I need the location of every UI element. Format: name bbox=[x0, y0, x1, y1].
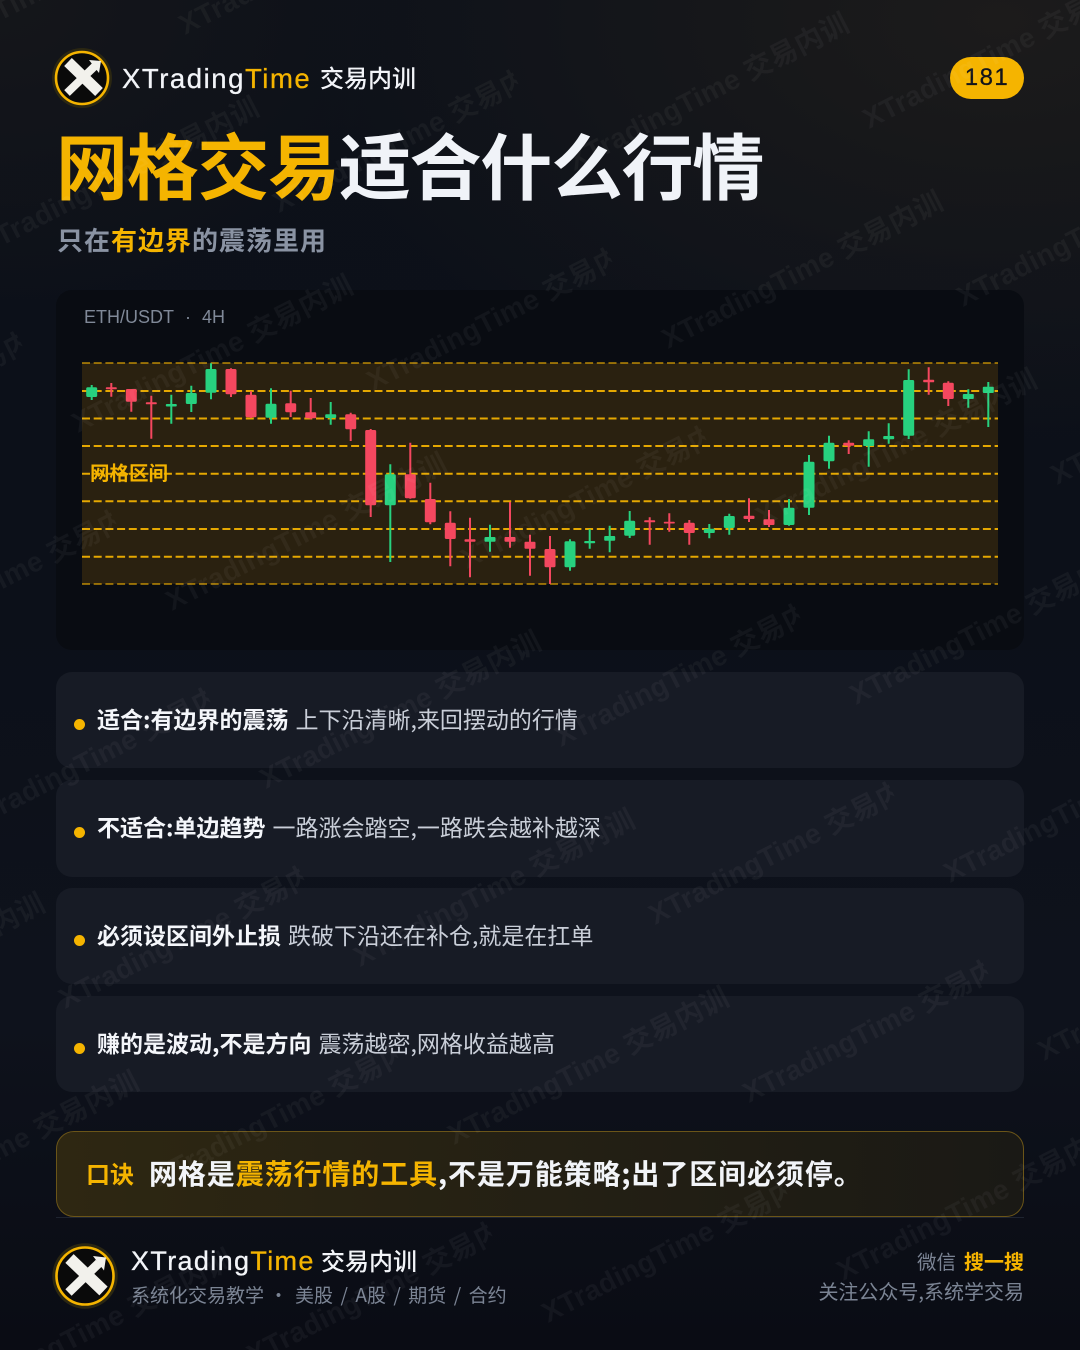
watermark layer: XTradingTime 交易内训 bbox=[161, 447, 452, 616]
card text: 赚的是波动,不是方向 震荡越密,网格收益越高 bbox=[97, 1025, 555, 1059]
card text: 必须设区间外止损 跌破下沿还在补仓,就是在扛单 bbox=[97, 917, 593, 951]
watermark layer: XTradingTime 交易内训 bbox=[54, 845, 345, 1014]
green candles bbox=[86, 363, 994, 571]
panel: candlestick chart bbox=[56, 290, 1024, 650]
brand suffix: 交易内训 bbox=[320, 59, 416, 94]
watermark layer: XTradingTime 交易内训 bbox=[362, 227, 653, 396]
footer wechat search: 微信 搜一搜 bbox=[917, 1246, 1024, 1275]
footer tagline: 系统化交易教学 · 美股 / A股 / 期货 / 合约 bbox=[131, 1281, 507, 1308]
callout text: 网格是震荡行情的工具,不是万能策略;出了区间必须停。 bbox=[149, 1153, 863, 1193]
watermark layer: XTradingTime 交易内训 bbox=[349, 803, 640, 972]
footer brand suffix: 交易内训 bbox=[321, 1242, 417, 1277]
bullet bbox=[74, 719, 85, 730]
red candles bbox=[106, 367, 954, 584]
footer follow note: 关注公众号,系统学交易 bbox=[818, 1276, 1024, 1305]
watermark layer: XTradingTime 交易内训 bbox=[550, 583, 841, 752]
card: suitable bbox=[56, 672, 1024, 768]
bullet bbox=[74, 827, 85, 838]
header logo bbox=[52, 48, 112, 108]
callout: mnemonic bbox=[56, 1131, 1024, 1217]
watermark layer: XTradingTime 交易内训 bbox=[148, 1023, 439, 1192]
issue number badge: 181 bbox=[965, 64, 1009, 91]
watermark layer: XTradingTime 交易内训 bbox=[751, 363, 1042, 532]
watermark layer: XTradingTime 交易内训 bbox=[456, 405, 747, 574]
chart pair label: ETH/USDT · 4H bbox=[84, 307, 225, 327]
card text: 不适合:单边趋势 一路涨会踏空,一路跌会越补越深 bbox=[97, 809, 601, 843]
card: not suitable bbox=[56, 780, 1024, 877]
watermark layer: XTradingTime 交易内训 bbox=[443, 981, 734, 1150]
bullet bbox=[74, 935, 85, 946]
candlestick chart with grid bbox=[82, 362, 998, 585]
watermark layer: XTradingTime 交易内训 bbox=[537, 1159, 828, 1328]
footer divider line bbox=[56, 1217, 1024, 1218]
watermark layer: XTradingTime 交易内训 bbox=[563, 7, 854, 176]
footer brand name: XTradingTime bbox=[131, 1246, 315, 1276]
card: profit source bbox=[56, 996, 1024, 1092]
card: stop loss bbox=[56, 888, 1024, 984]
title: 网格交易适合什么行情 bbox=[56, 110, 763, 215]
subtitle: 只在有边界的震荡里用 bbox=[57, 221, 327, 258]
watermark layer: XTradingTime 交易内训 bbox=[67, 269, 358, 438]
grid range label: 网格区间 bbox=[90, 457, 168, 486]
issue number badge bbox=[950, 57, 1024, 99]
card text: 适合:有边界的震荡 上下沿清晰,来回摆动的行情 bbox=[97, 701, 578, 735]
callout label: 口诀 bbox=[86, 1155, 134, 1190]
watermark layer: XTradingTime 交易内训 bbox=[268, 49, 559, 218]
watermark layer: XTradingTime 交易内训 bbox=[738, 939, 1029, 1108]
brand name: XTradingTime bbox=[122, 62, 311, 94]
watermark layer: XTradingTime 交易内训 bbox=[657, 185, 948, 354]
watermark layer: XTradingTime 交易内训 bbox=[644, 761, 935, 930]
watermark layer: XTradingTime 交易内训 bbox=[255, 625, 546, 794]
bullet bbox=[74, 1043, 85, 1054]
footer logo bbox=[52, 1243, 118, 1309]
